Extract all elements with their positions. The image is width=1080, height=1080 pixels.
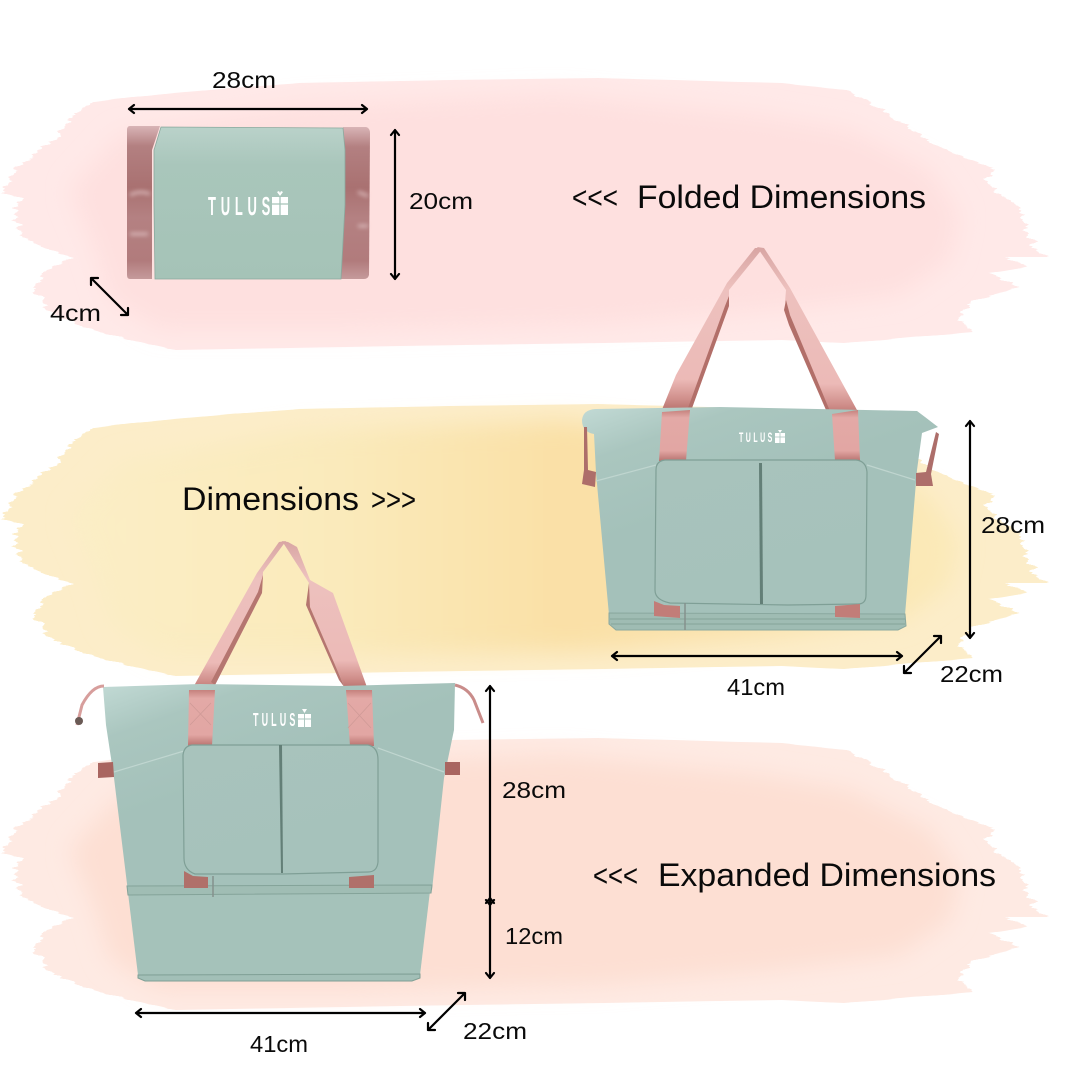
- expanded bag dimension labels: 41cm: [250, 1031, 308, 1057]
- expanded bag dimension labels: 28cm: [502, 777, 566, 803]
- left side tab: [582, 427, 596, 487]
- heading: dimensions: >>>: [371, 482, 416, 517]
- pocket centre slit: [759, 463, 763, 604]
- logo: TULUS: [208, 192, 275, 221]
- zipper seam: [127, 885, 432, 895]
- left handle inner edge: [688, 296, 729, 408]
- left handle inner edge: [211, 575, 263, 685]
- lower compartment: [128, 891, 430, 975]
- expanded bag photo: [75, 541, 483, 981]
- lower gusset: [609, 613, 906, 630]
- expanded bag dimension labels: 22cm: [463, 1018, 527, 1044]
- brush stroke: folded background: [2, 78, 1047, 350]
- medium bag dimension labels: [727, 512, 1045, 700]
- brush stroke: expanded background: [2, 738, 1047, 1010]
- heading: expanded dimensions: Expanded Dimensions: [658, 857, 996, 893]
- right side tab: [916, 432, 939, 486]
- front pocket: [655, 460, 867, 605]
- right handle inner edge: [306, 583, 345, 688]
- right side cord: [455, 685, 483, 723]
- medium bag photo: [582, 247, 939, 630]
- right handle: [282, 541, 368, 690]
- logo: TULUS: [253, 711, 298, 731]
- folded dimension labels: 20cm: [409, 188, 473, 214]
- folded dimension labels: 28cm: [212, 67, 276, 93]
- left side cord: [77, 686, 104, 725]
- pocket seam lines: [596, 465, 915, 481]
- right handle inner edge: [784, 300, 832, 416]
- right pink band: [340, 127, 370, 279]
- zipper pull: [212, 876, 214, 897]
- brush stroke: dimensions background: [2, 404, 1047, 676]
- lower red tabs: [184, 871, 374, 888]
- left pink band: [127, 126, 160, 279]
- folded dimension labels: [50, 67, 473, 326]
- left grommet: [75, 717, 83, 725]
- folded dimension labels: 4cm: [50, 300, 101, 326]
- heading: dimensions: Dimensions: [182, 481, 359, 517]
- expanded bag dimension labels: [250, 777, 566, 1057]
- left handle: [190, 541, 286, 693]
- expanded bag dimension labels: 12cm: [505, 923, 563, 949]
- bottom base: [138, 974, 420, 981]
- expanded bag dimension arrows: [136, 686, 494, 1030]
- left handle: [661, 248, 763, 412]
- bag body: [582, 407, 938, 615]
- logo: TULUS: [739, 431, 775, 446]
- zipper pull: [684, 603, 686, 630]
- left lower strap: [659, 410, 690, 461]
- medium bag dimension labels: 22cm: [940, 661, 1003, 687]
- left lower strap: [188, 690, 215, 746]
- heading: folded dimensions: Folded Dimensions: [637, 179, 926, 215]
- folded bag photo: [127, 126, 370, 279]
- lower red tabs: [654, 601, 860, 618]
- medium bag dimension arrows: [612, 421, 974, 673]
- pocket seam lines: [114, 748, 444, 772]
- right lower strap: [346, 690, 374, 746]
- green fold panel: [154, 127, 345, 279]
- folded dimension arrows: [91, 105, 399, 315]
- front pocket: [183, 745, 378, 874]
- bag body: [103, 683, 455, 892]
- right lower strap: [832, 410, 860, 461]
- heading: expanded dimensions: <<<: [593, 858, 638, 893]
- left red loop: [98, 762, 114, 778]
- heading: folded dimensions: <<<: [572, 180, 618, 215]
- pocket centre slit: [279, 745, 283, 873]
- medium bag dimension labels: 41cm: [727, 674, 785, 700]
- right red loop: [445, 762, 460, 775]
- medium bag dimension labels: 28cm: [981, 512, 1045, 538]
- right handle: [757, 247, 857, 418]
